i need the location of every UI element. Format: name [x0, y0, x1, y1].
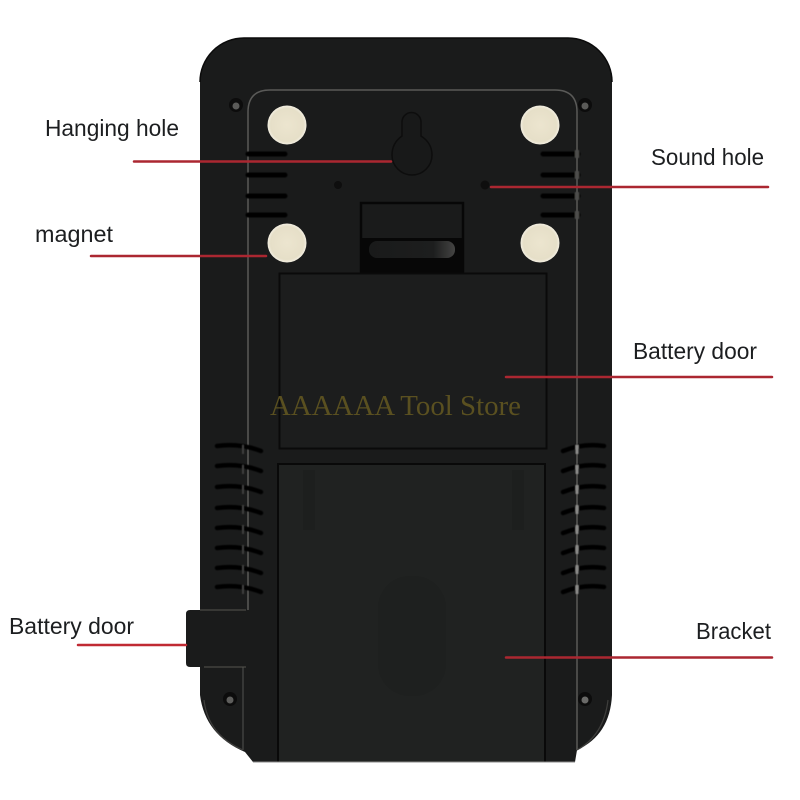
red line: battery door right: [506, 376, 772, 378]
inner raised outline: [248, 90, 577, 750]
bracket grooves: [303, 470, 315, 530]
device body: [200, 38, 612, 762]
label: hanging hole: Hanging hole: [45, 115, 179, 141]
red line: bracket: [506, 656, 772, 659]
icon: keyhole hanging hole: [392, 112, 432, 175]
bracket oval recess: [378, 576, 446, 696]
label: sound hole: Sound hole: [651, 144, 764, 170]
magnet: bottom left: [268, 224, 306, 262]
sound hole: right: [480, 180, 490, 190]
bracket clip: [361, 203, 463, 273]
label: battery door left: Battery door: [9, 613, 134, 639]
watermark: AAAAAA Tool Store: [270, 390, 521, 422]
red line: battery door left: [78, 644, 186, 646]
screw: top right: [578, 98, 592, 112]
lower right vent: [563, 445, 604, 600]
bottom shine: [253, 761, 575, 763]
red line: hanging hole: [134, 160, 391, 163]
sound hole: left: [334, 181, 342, 189]
red line: sound hole: [491, 186, 768, 188]
upper left vent: [248, 154, 285, 215]
screw: bottom right: [578, 692, 592, 706]
lower left vent: [217, 445, 261, 600]
magnet: bottom right: [520, 224, 560, 262]
label: battery door right: Battery door: [633, 338, 757, 364]
battery door panel: [280, 274, 546, 448]
red line: magnet: [91, 255, 266, 257]
upper right vent: [543, 150, 578, 219]
screw: top left: [229, 98, 243, 112]
bracket panel: [278, 464, 545, 762]
magnet: top left: [268, 106, 306, 144]
screw: bottom left: [223, 692, 237, 706]
label: bracket: Bracket: [696, 618, 772, 644]
label: magnet: magnet: [35, 221, 114, 247]
battery door tab: [186, 610, 246, 667]
magnet: top right: [520, 106, 560, 144]
